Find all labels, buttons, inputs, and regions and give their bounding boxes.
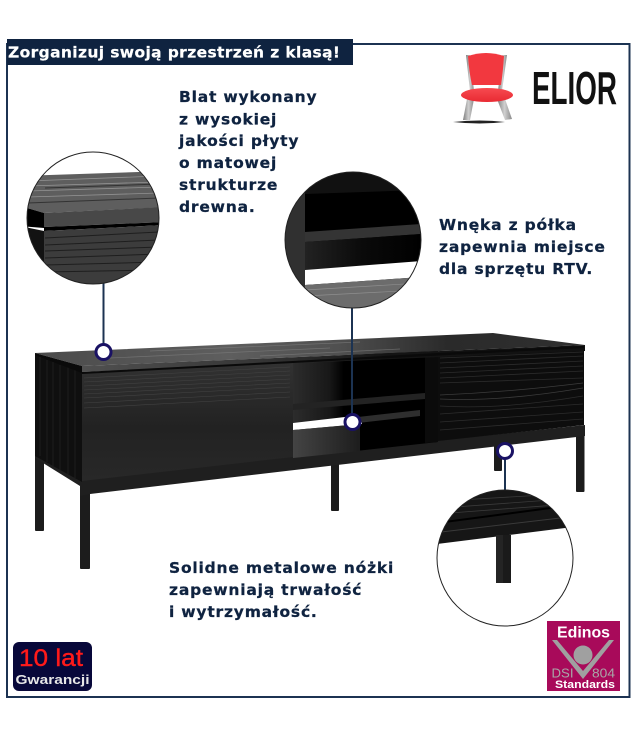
callout: blat text: o matowej — [179, 154, 277, 172]
cabinet left door — [82, 362, 293, 481]
wood grain: side panel — [40, 356, 75, 478]
cabinet legs — [35, 428, 584, 569]
connector lines — [104, 283, 505, 492]
wood grain: left door — [84, 367, 290, 408]
cabinet top surface — [35, 333, 585, 366]
magnified detail: leg — [437, 490, 573, 626]
brand logo: Elior — [453, 53, 617, 124]
callout: blat text: Blat wykonany — [179, 88, 317, 106]
badge: 10 years warranty: 10 lat — [19, 645, 83, 672]
marker dots — [96, 344, 512, 458]
badge: Edinos standards: DSI — [552, 666, 574, 680]
cabinet top edge — [82, 345, 585, 372]
icon: red chair — [453, 53, 513, 124]
cabinet side panel — [35, 353, 82, 482]
callout: blat text: z wysokiej — [179, 110, 277, 128]
callout: niche text: dla sprzętu RTV. — [439, 260, 593, 278]
badge: Edinos standards: Edinos — [557, 624, 610, 642]
callout: legs text: zapewniają trwałość — [169, 581, 362, 599]
cabinet right door — [438, 347, 584, 441]
callout: blat text: drewna. — [179, 198, 256, 216]
callout: legs text: Solidne metalowe nóżki — [169, 559, 394, 577]
callout: niche text: Wnęka z półka — [439, 216, 577, 234]
callout: legs text: i wytrzymałość. — [169, 603, 318, 621]
badge: 10 years warranty — [13, 642, 92, 691]
wood grain: right door — [440, 352, 583, 430]
callout: niche text: zapewnia miejsce — [439, 238, 606, 256]
wood grain: top surface — [110, 342, 400, 358]
badge: Edinos standards: 804 — [592, 666, 615, 680]
callout: blat text: strukturze — [179, 176, 278, 194]
title banner — [7, 39, 353, 65]
badge: 10 years warranty: Gwarancji — [16, 673, 90, 687]
cabinet niche — [293, 350, 438, 458]
magnified detail: niche — [285, 172, 421, 308]
badge: Edinos standards: Standards — [555, 679, 615, 691]
callout: blat text: jakości płyty — [178, 132, 299, 150]
magnified detail: table top — [26, 152, 160, 284]
badge: Edinos standards — [547, 621, 620, 691]
product: TV cabinet — [35, 333, 585, 569]
title banner: Zorganizuj swoją przestrzeń z klasą! — [8, 44, 340, 62]
cabinet base rail — [35, 425, 585, 496]
